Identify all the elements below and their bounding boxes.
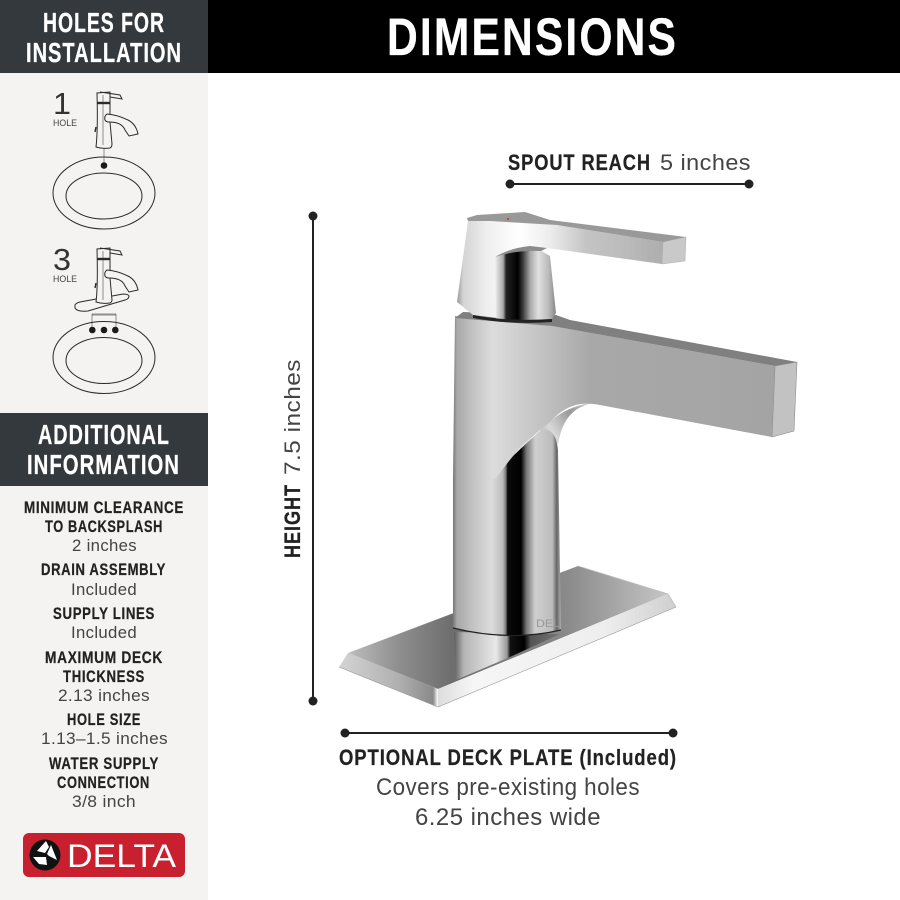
spec: maximum deck thickness: THICKNESS: [63, 667, 145, 686]
faucet stem: [453, 424, 561, 636]
label: 1 hole: [53, 86, 77, 129]
icon: sink with one hole: [53, 157, 155, 229]
spec: hole size: [41, 710, 168, 748]
label: 3 hole: 3: [53, 242, 71, 277]
label: 1 hole: 1: [53, 86, 71, 121]
spec: drain assembly: DRAIN ASSEMBLY: [41, 560, 166, 579]
dimension: optional deck plate: 6.25 inches wide: [415, 804, 601, 831]
dimension: optional deck plate: OPTIONAL DECK PLATE (Included): [339, 745, 677, 770]
icon: three hole installation: [53, 242, 155, 394]
spec: hole size: 1.13–1.5 inches: [41, 729, 168, 748]
spec: drain assembly: [41, 560, 166, 599]
spout underside: [500, 403, 592, 473]
dimension: optional deck plate: [339, 728, 678, 831]
text block: additional information list: [24, 498, 184, 811]
header: holes for installation: [0, 0, 208, 73]
spec: water supply connection: [49, 754, 159, 811]
spec: drain assembly: Included: [71, 580, 137, 599]
header: holes for installation: HOLES FOR: [43, 7, 165, 38]
sidebar background: [0, 0, 208, 900]
deck plate: [339, 566, 676, 707]
spout end face: [772, 362, 797, 437]
header: additional information: ADDITIONAL: [38, 419, 170, 450]
spec: water supply connection: CONNECTION: [57, 773, 150, 792]
spout top face: [455, 312, 797, 366]
dimension: height: 7.5 inches: [280, 359, 305, 475]
spec: maximum deck thickness: 2.13 inches: [58, 686, 150, 705]
icon: faucet with deck plate: [75, 248, 138, 328]
illustration: chrome faucet: [339, 212, 797, 707]
label: 1 hole: HOLE: [53, 118, 77, 129]
spec: minimum clearance: MINIMUM CLEARANCE: [24, 498, 184, 517]
label: 3 hole: HOLE: [53, 274, 77, 285]
spout body: [453, 316, 775, 478]
spec: maximum deck thickness: MAXIMUM DECK: [45, 648, 163, 667]
faucet stem: DEL: [536, 618, 560, 630]
header: holes for installation: INSTALLATION: [26, 37, 182, 68]
title bar: dimensions: DIMENSIONS: [387, 8, 678, 67]
dimension: height: HEIGHT: [280, 484, 305, 558]
spec: supply lines: [53, 604, 155, 642]
header: additional information: [0, 413, 208, 486]
icon: one hole installation: [53, 86, 155, 229]
spec: water supply connection: 3/8 inch: [72, 792, 136, 811]
label: 3 hole: [53, 242, 77, 285]
spec: minimum clearance: [24, 498, 184, 555]
handle: [457, 212, 686, 323]
spec: supply lines: SUPPLY LINES: [53, 604, 155, 623]
dimension: optional deck plate: Covers pre-existing holes: [376, 774, 640, 801]
dimension: spout reach: 5 inches: [660, 150, 751, 175]
dimension: spout reach: SPOUT REACH: [508, 150, 651, 175]
icon: single hole faucet: [95, 92, 138, 162]
icon: sink with three holes: [53, 322, 155, 394]
logo: delta: DELTA: [67, 838, 177, 874]
dimension: spout reach: [506, 150, 754, 188]
spec: supply lines: Included: [71, 623, 137, 642]
title bar: dimensions: [208, 0, 900, 73]
spec: maximum deck thickness: [45, 648, 163, 705]
spec: minimum clearance: TO BACKSPLASH: [45, 517, 163, 536]
logo: delta: [23, 833, 185, 877]
spec: hole size: HOLE SIZE: [67, 710, 141, 729]
dimension: height: [280, 212, 318, 706]
spec: minimum clearance: 2 inches: [72, 536, 137, 555]
spec: water supply connection: WATER SUPPLY: [49, 754, 159, 773]
header: additional information: INFORMATION: [27, 449, 180, 480]
